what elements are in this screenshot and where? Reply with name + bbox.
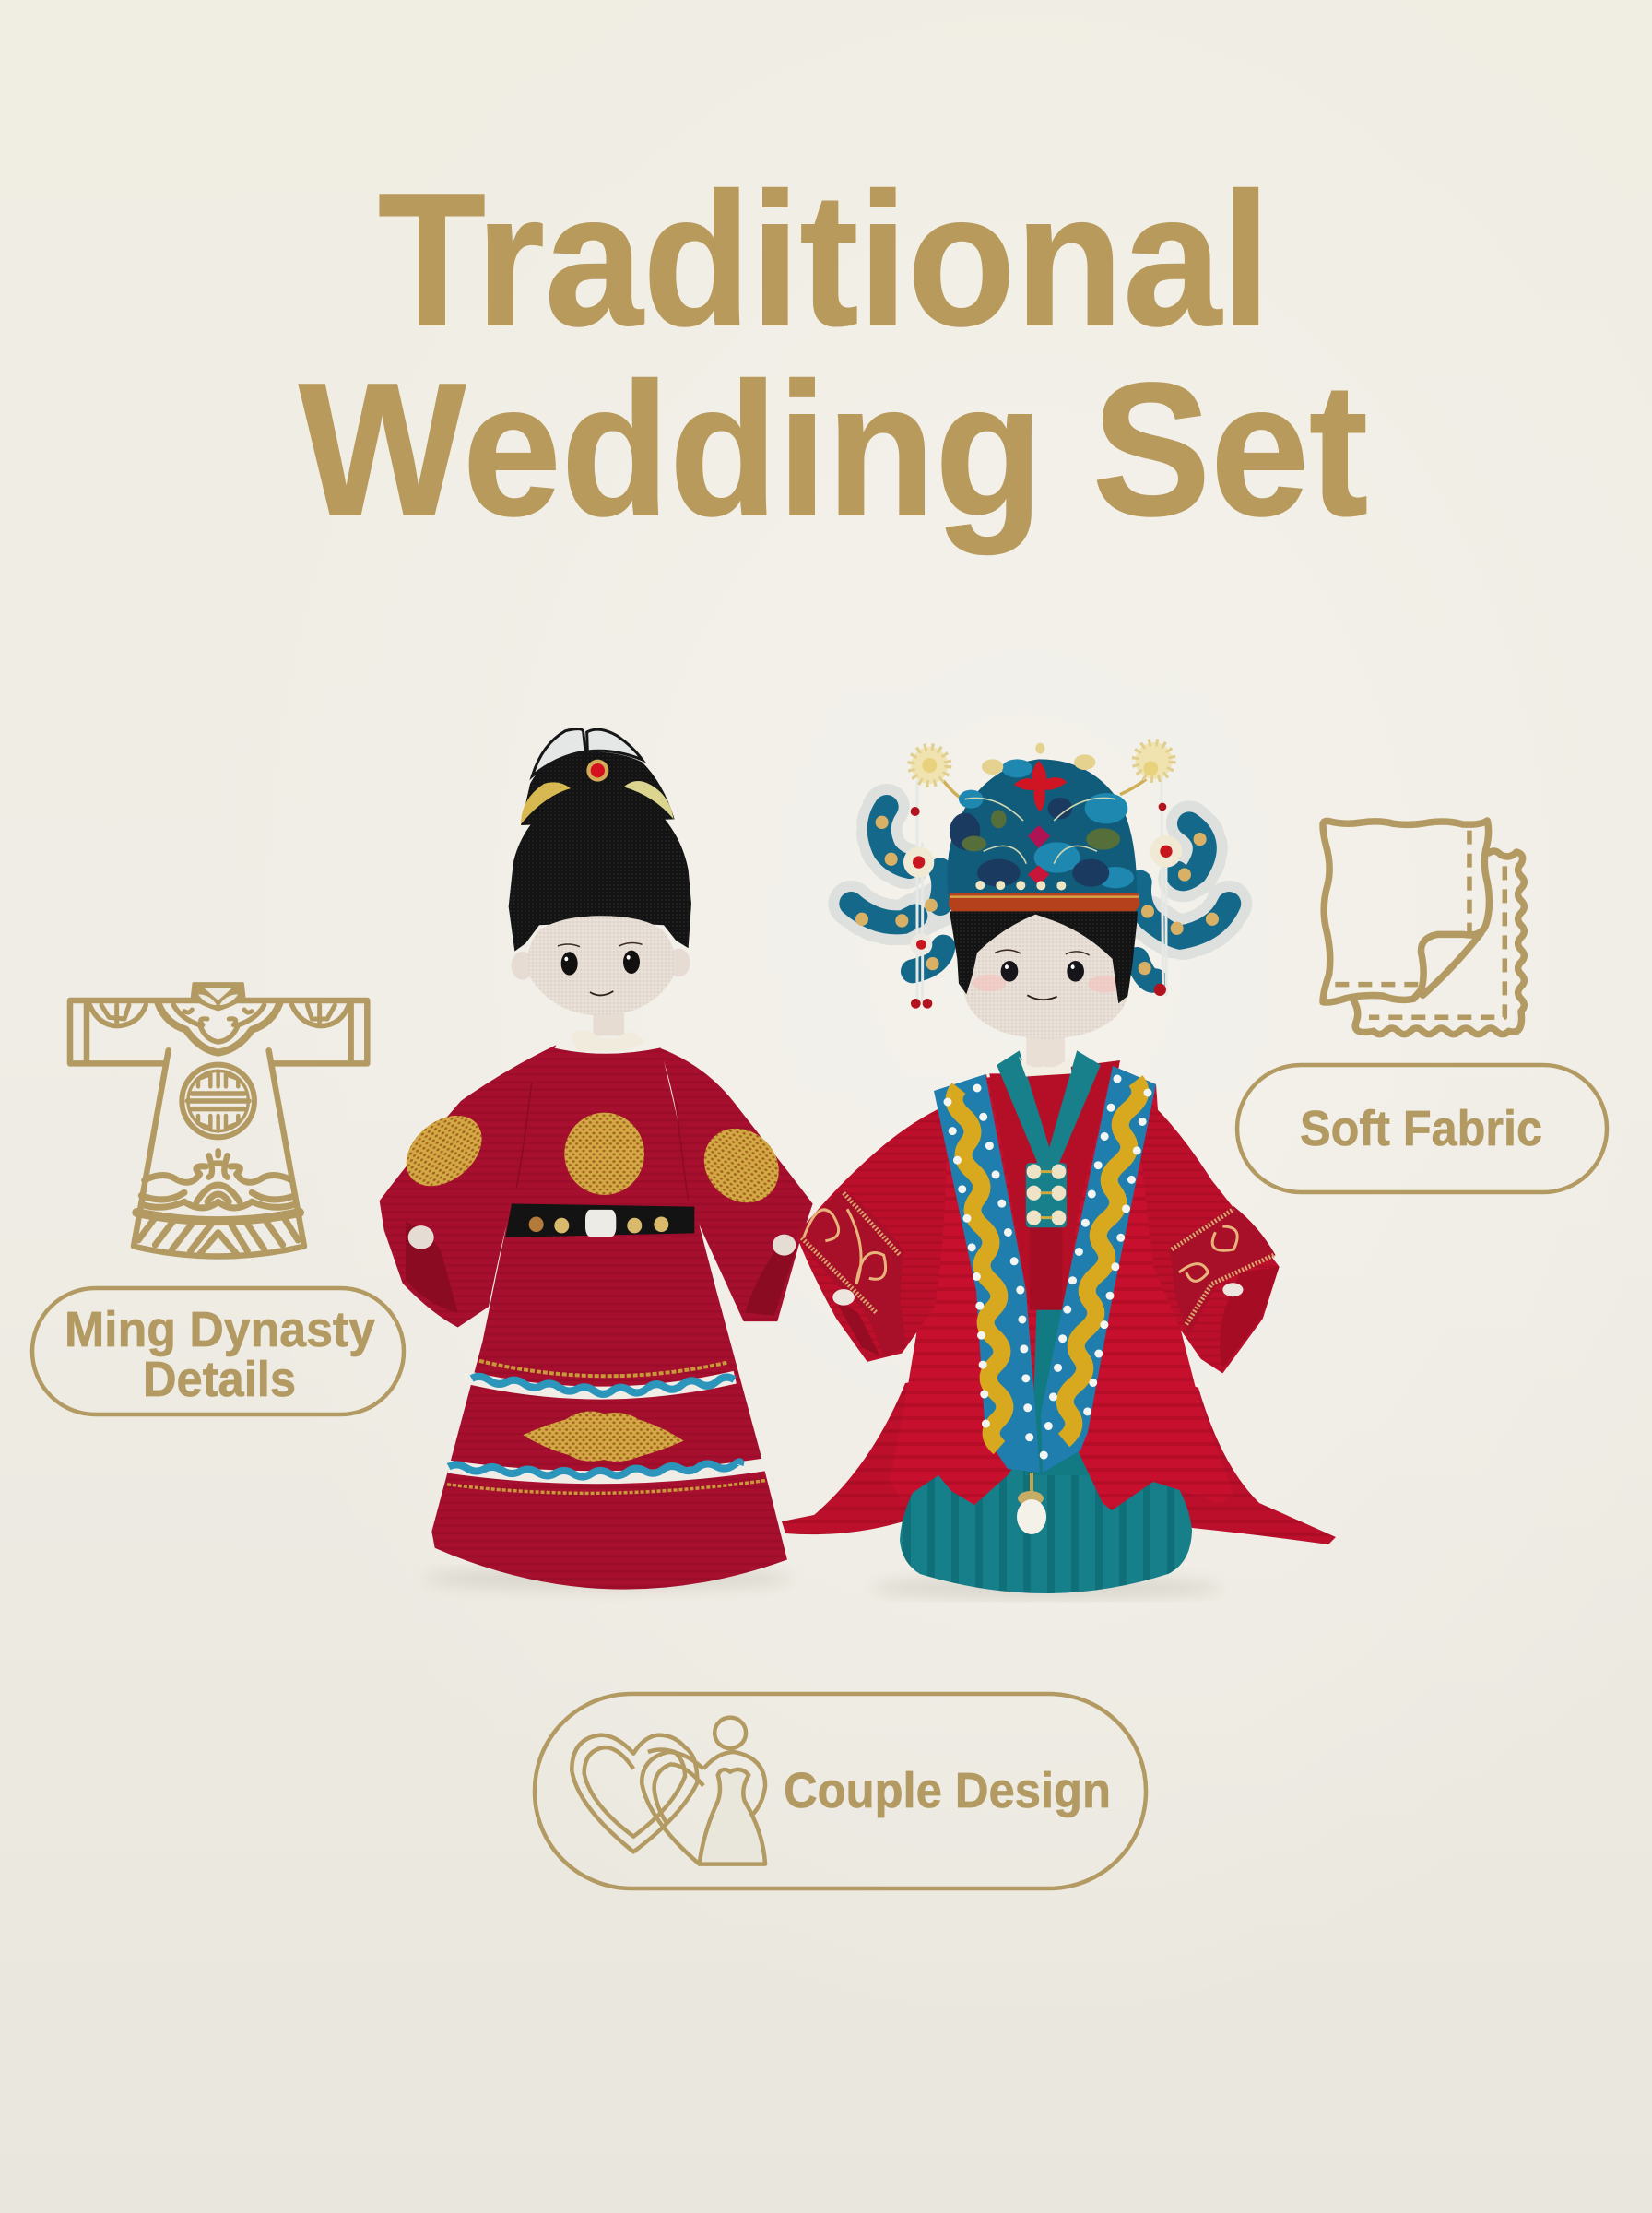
- bride doll: [782, 742, 1336, 1593]
- label pill: Soft Fabric: [1237, 1065, 1607, 1192]
- bride crown: [947, 743, 1140, 913]
- bride left sleeve: [796, 1106, 947, 1362]
- label pill: Ming Dynasty Details: Ming Dynasty: [65, 1302, 375, 1357]
- groom skirt bands: [447, 1361, 767, 1493]
- bride chest and collar: [989, 1050, 1101, 1310]
- title: [299, 154, 1368, 555]
- label pill: Ming Dynasty Details: Details: [143, 1352, 296, 1407]
- label pill: Soft Fabric: Soft Fabric: [1300, 1101, 1542, 1156]
- bride pendants and flowers: [903, 742, 1182, 1009]
- right feature: soft fabric: [1237, 821, 1607, 1192]
- bottom feature pill: couple design: [535, 1694, 1146, 1888]
- bride beaded V trim: [934, 1066, 1156, 1473]
- groom belt: [505, 1203, 694, 1237]
- icon: fabric swatches: [1323, 821, 1524, 1035]
- title: Traditional: [378, 154, 1270, 365]
- groom doll: [380, 729, 813, 1590]
- bride teal skirt: [900, 1462, 1192, 1593]
- bride pearl pendant: [1017, 1473, 1046, 1534]
- groom robe: [380, 1045, 813, 1590]
- groom gold medallions: [403, 1104, 781, 1209]
- title: Wedding Set: [299, 344, 1368, 555]
- icon: hearts and bride: [572, 1718, 765, 1864]
- label pill: Ming Dynasty Details: [32, 1288, 404, 1414]
- ground shadow under dolls: [424, 1568, 1221, 1599]
- label: Couple Design: Couple Design: [784, 1763, 1111, 1818]
- left feature: Ming dynasty details: [32, 984, 404, 1414]
- groom gold ornament: [523, 1412, 684, 1462]
- icon: dragon robe: [70, 984, 367, 1256]
- groom head: [509, 729, 691, 1051]
- bride right sleeve: [1133, 1088, 1280, 1373]
- bride lace collar: [1019, 1057, 1071, 1077]
- bride back tails: [782, 1374, 1336, 1544]
- bride head: [950, 911, 1138, 1071]
- bride red robe panels: [890, 1060, 1233, 1510]
- bride headdress arms: [851, 807, 1229, 981]
